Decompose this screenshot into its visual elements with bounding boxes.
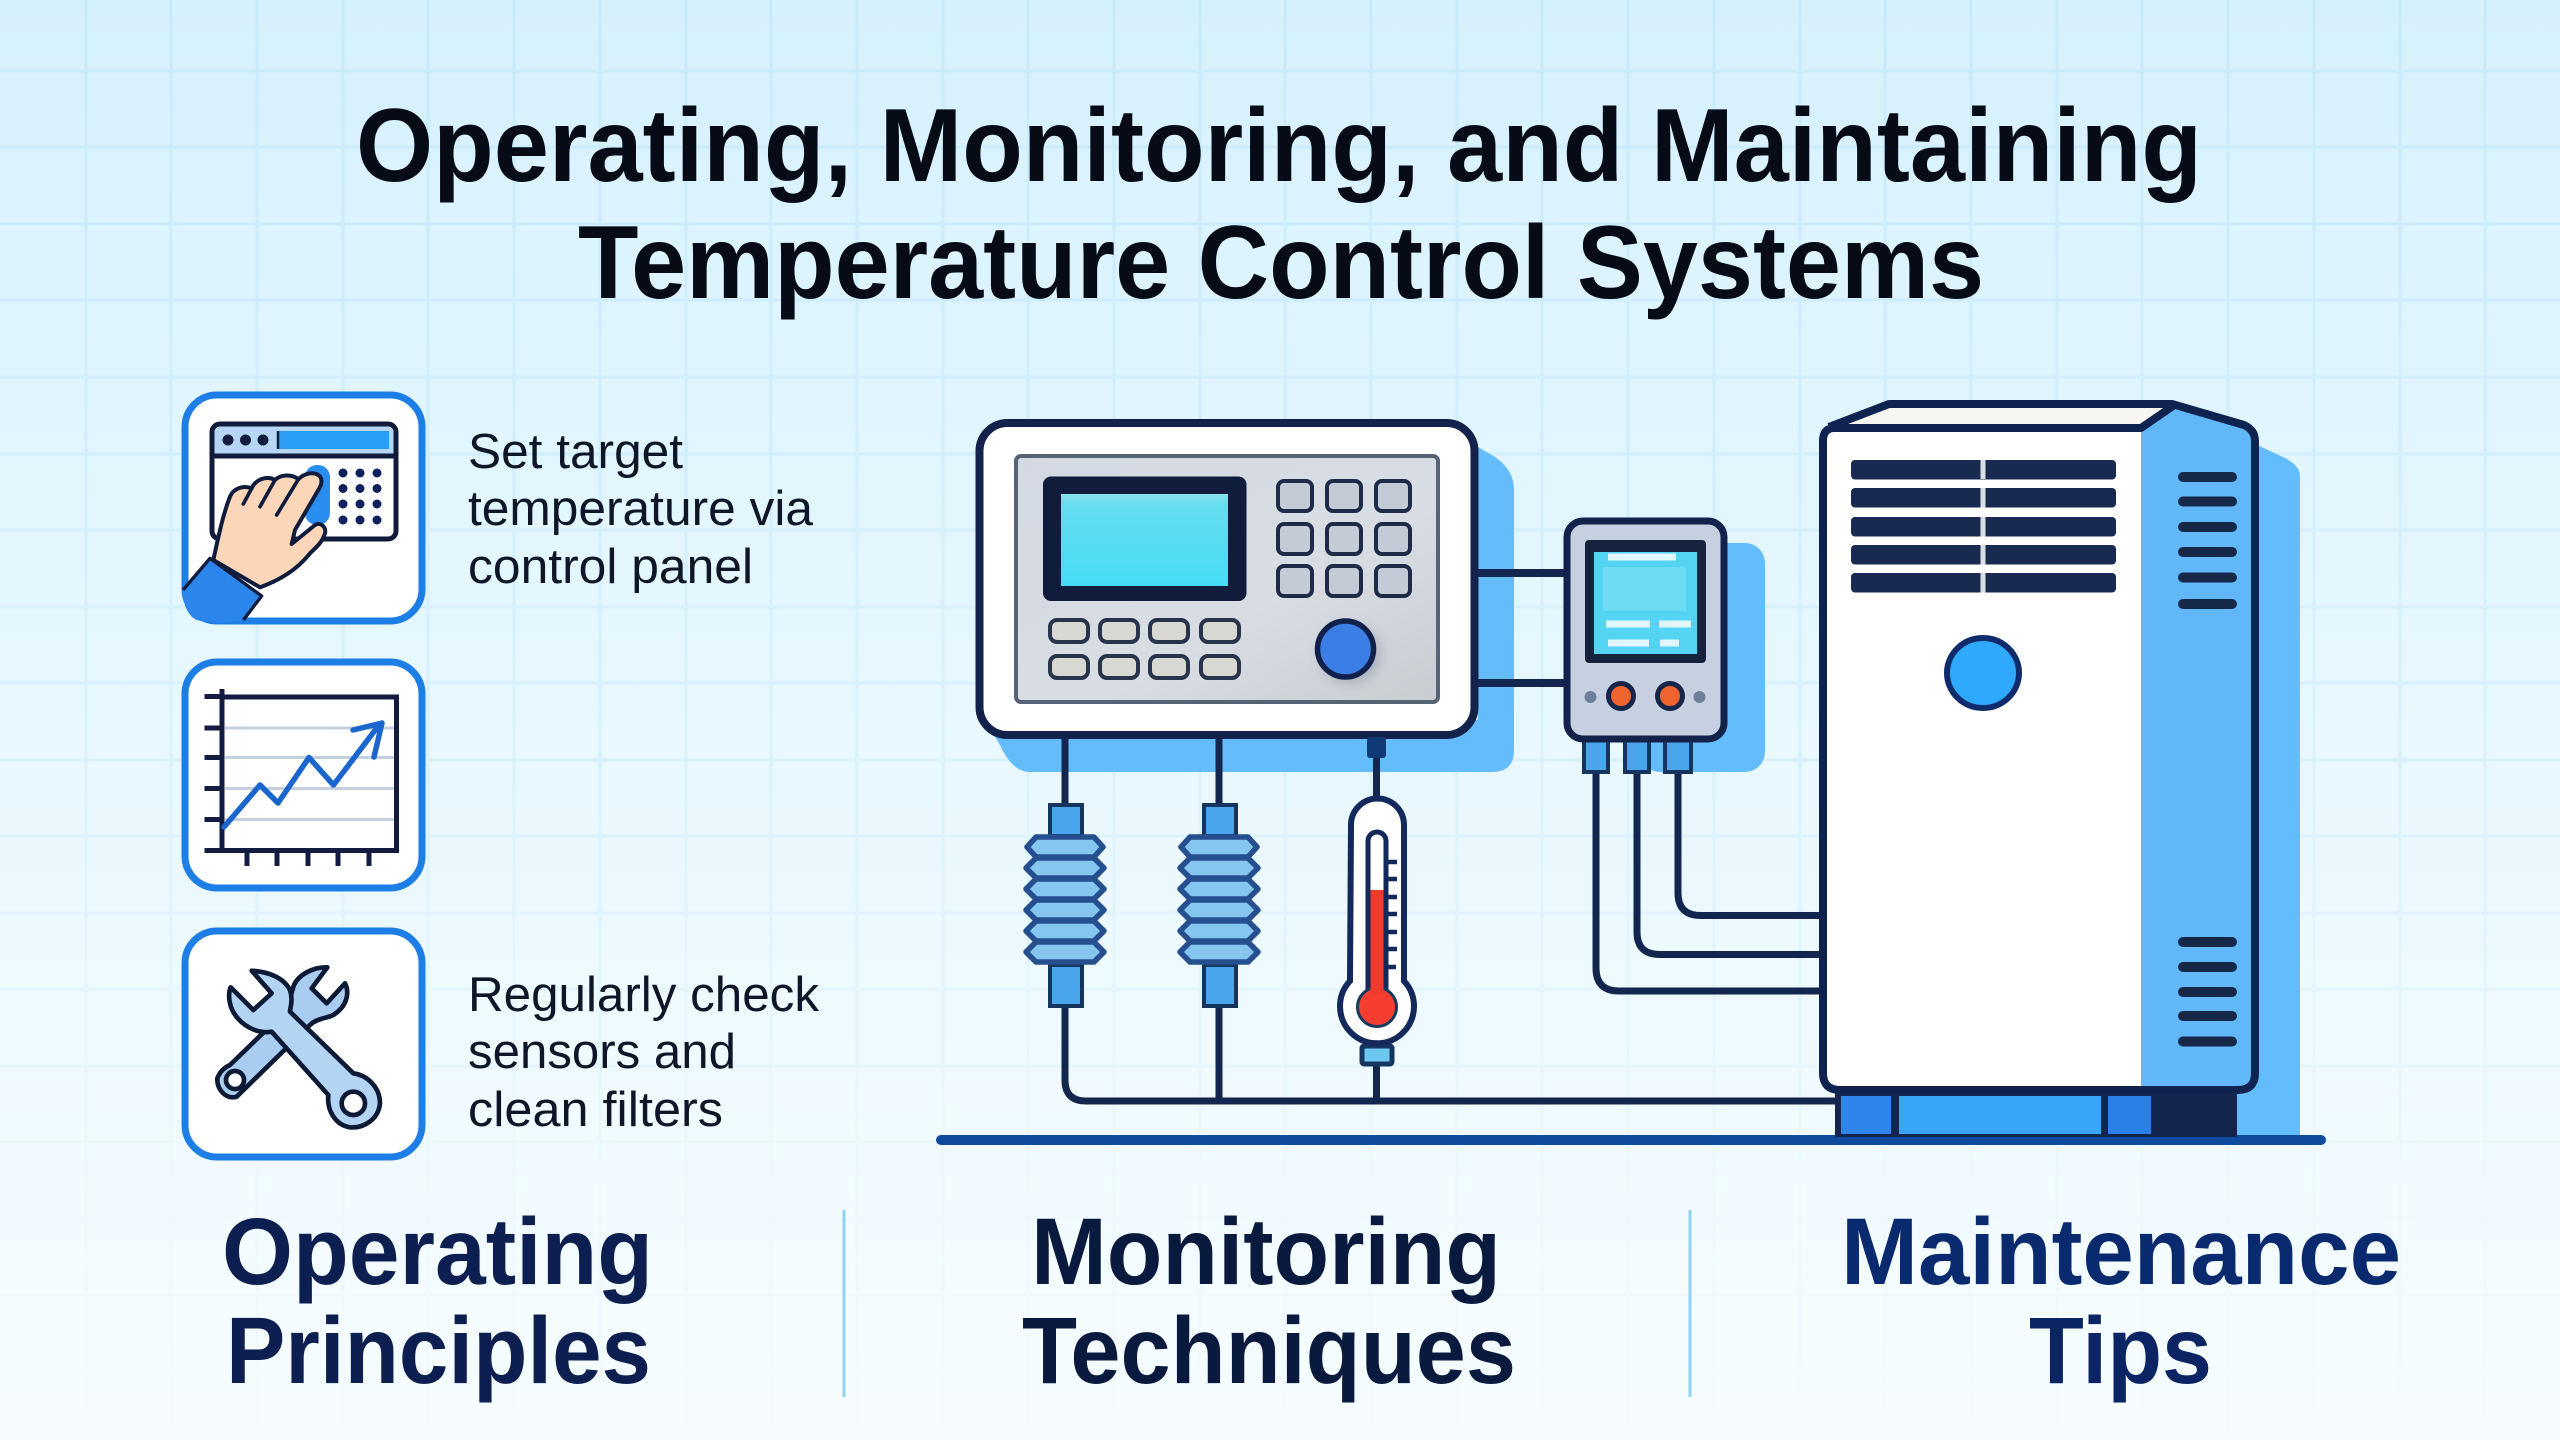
heading: maintenance tips — [1841, 1199, 2401, 1404]
meter — [1567, 521, 1724, 772]
wires: meter to unit — [1596, 770, 1820, 991]
face plate — [1016, 456, 1438, 702]
divider — [1688, 1210, 1692, 1397]
meter shadow — [1640, 543, 1765, 772]
meter terminals — [1584, 740, 1691, 772]
text block: maintenance note: Regularly check — [468, 968, 819, 1022]
heading: operating principles — [222, 1199, 653, 1404]
icon: crossed wrenches — [217, 967, 380, 1127]
panel: monitoring card — [185, 662, 422, 888]
thermometer — [1340, 737, 1414, 1064]
unit top face — [1826, 405, 2172, 431]
sensor coil 2 — [1180, 805, 1258, 1006]
unit body — [1823, 404, 2255, 1090]
panel shadow — [985, 447, 1514, 772]
divider — [842, 1210, 846, 1397]
knob — [1318, 621, 1381, 684]
unit base — [1835, 1093, 2237, 1137]
text block: operating note: Set target — [468, 425, 683, 479]
front vent slats — [1851, 460, 2116, 592]
unit knob — [1947, 638, 2019, 708]
heading: operating principles: Principles — [226, 1298, 651, 1404]
title: Temperature Control Systems — [578, 205, 1984, 321]
chart: temperature trend — [204, 689, 396, 866]
heading: monitoring techniques — [1022, 1199, 1516, 1404]
title: Operating, Monitoring, and Maintaining — [356, 88, 2202, 204]
heading: monitoring techniques: Monitoring — [1031, 1199, 1501, 1305]
side vents — [2183, 477, 2232, 1042]
wires: panel to sensors and unit — [1065, 739, 1838, 1101]
ground line — [941, 1135, 2321, 1145]
text block: operating note: temperature via — [468, 482, 814, 536]
icon: control panel window — [212, 424, 396, 539]
text block: maintenance note — [468, 968, 819, 1137]
keypad — [1278, 481, 1410, 596]
unit rear shadow — [2230, 444, 2300, 1135]
panel: operating card — [183, 395, 422, 622]
display — [1043, 476, 1246, 601]
heading: maintenance tips: Tips — [2029, 1298, 2212, 1404]
function buttons — [1050, 620, 1239, 678]
diagram: air conditioning unit — [1823, 404, 2300, 1137]
meter screen — [1585, 540, 1706, 663]
heading: operating principles: Operating — [222, 1199, 653, 1305]
arrow: rising line — [224, 723, 382, 827]
heading: monitoring techniques: Techniques — [1022, 1298, 1516, 1404]
text block: maintenance note: sensors and — [468, 1025, 736, 1079]
heading: maintenance tips: Maintenance — [1841, 1199, 2401, 1305]
meter buttons — [1584, 684, 1706, 708]
panel: maintenance card — [185, 931, 422, 1157]
sensor coil 1 — [1026, 805, 1104, 1006]
icon: hand pressing button — [183, 473, 325, 622]
title — [356, 88, 2202, 321]
text block: maintenance note: clean filters — [468, 1083, 723, 1137]
control panel — [980, 423, 1474, 735]
text block: operating note: control panel — [468, 540, 753, 594]
connector cables between panel and meter — [1474, 573, 1567, 683]
text block: operating note — [468, 425, 814, 594]
